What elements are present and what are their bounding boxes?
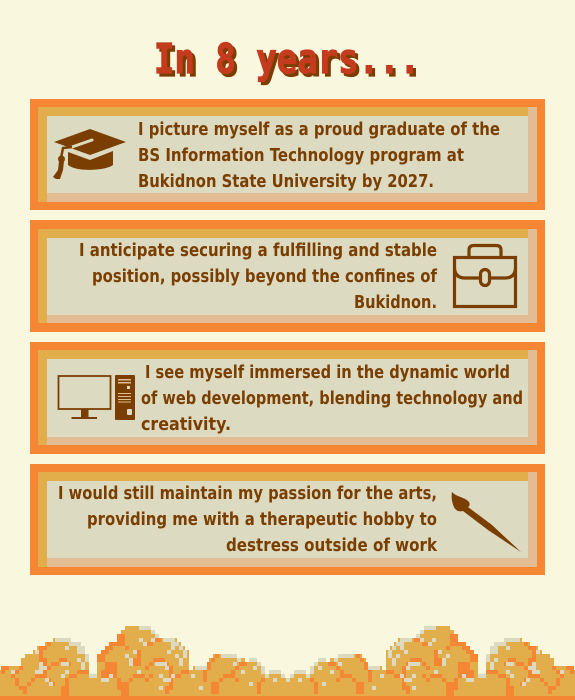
icon: briefcase xyxy=(454,246,516,306)
icon: graduation cap xyxy=(53,129,126,179)
text: career: position, possibly beyond the confines of xyxy=(92,267,437,287)
panel: career xyxy=(30,220,545,332)
text: arts hobby xyxy=(58,484,437,556)
panel: arts hobby xyxy=(30,464,545,575)
text: arts hobby: destress outside of work xyxy=(226,536,437,556)
panel: web development xyxy=(30,342,545,454)
text: graduate xyxy=(138,120,500,192)
title: In 8 years... xyxy=(154,35,420,83)
text: web development: I see myself immersed in the dynamic world xyxy=(145,363,510,383)
text: arts hobby: providing me with a therapeutic hobby to xyxy=(87,510,437,530)
text: arts hobby: I would still maintain my passion for the arts, xyxy=(58,484,437,504)
text: web development: creativity. xyxy=(141,415,231,435)
text: graduate: Bukidnon State University by 2027. xyxy=(138,172,434,192)
text: career xyxy=(79,241,437,313)
icon: desktop computer xyxy=(58,375,135,420)
icon: paint brush xyxy=(452,492,521,552)
text: web development xyxy=(141,363,523,435)
text: graduate: BS Information Technology program at xyxy=(138,146,464,166)
title: In 8 years... xyxy=(157,38,423,86)
panel: graduate xyxy=(30,99,545,210)
pixel flower border xyxy=(0,626,575,700)
text: career: I anticipate securing a fulfilling and stable xyxy=(79,241,437,261)
text: graduate: I picture myself as a proud graduate of the xyxy=(138,120,500,140)
text: career: Bukidnon. xyxy=(354,293,437,313)
